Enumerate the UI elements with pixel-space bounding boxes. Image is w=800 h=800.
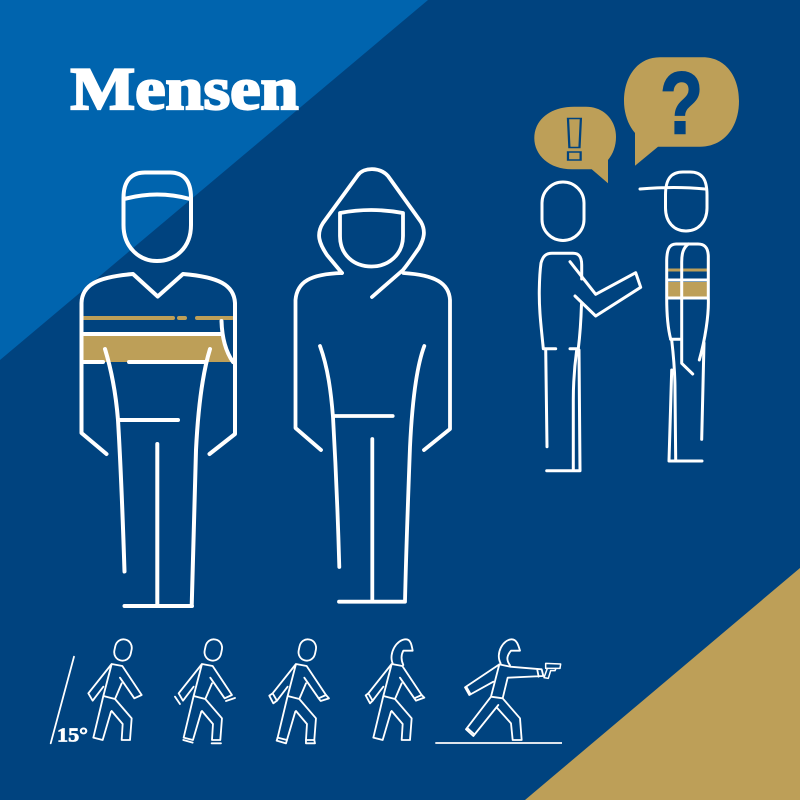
gold stripe [668, 268, 707, 272]
figure: person with hoodie [296, 169, 450, 602]
shooter with pistol [465, 639, 561, 740]
light blue corner triangle [0, 0, 428, 360]
head with cap [124, 172, 191, 261]
walker 3 with gloves and shoes [269, 638, 329, 743]
pistol [544, 663, 561, 678]
torso [539, 253, 582, 349]
shirt gold band [82, 335, 232, 362]
torso and arm [667, 244, 708, 374]
title: Mensen [70, 56, 298, 122]
torso and arms [82, 274, 235, 454]
legs [546, 349, 580, 471]
gold band [668, 282, 708, 297]
question mark: ? [660, 54, 703, 152]
figure: man with cap and striped shirt [82, 172, 235, 606]
walker 4 with hood [366, 639, 424, 740]
jacket and arms [296, 273, 450, 450]
ground line [435, 742, 562, 744]
trousers [105, 349, 210, 606]
face [340, 210, 403, 266]
shirt lines [82, 321, 233, 362]
hood [319, 169, 424, 297]
figure: person speaking, gesturing [539, 182, 641, 471]
head with cap [640, 172, 707, 231]
gesturing arm [570, 262, 641, 316]
speech bubble: exclamation [534, 107, 616, 183]
legs [669, 339, 704, 461]
exclamation mark: ! [560, 107, 589, 173]
trousers [320, 346, 424, 602]
walker 1 [88, 638, 142, 740]
angle line [51, 657, 74, 743]
shirt gold stripe [82, 316, 232, 320]
speech bubble: question [624, 54, 739, 166]
gold corner triangle [525, 568, 800, 800]
head [542, 182, 584, 240]
walker 2 with hand and foot marks [175, 638, 235, 743]
angle label: 15° [57, 726, 88, 746]
figure: person in cap, side view [640, 172, 708, 461]
